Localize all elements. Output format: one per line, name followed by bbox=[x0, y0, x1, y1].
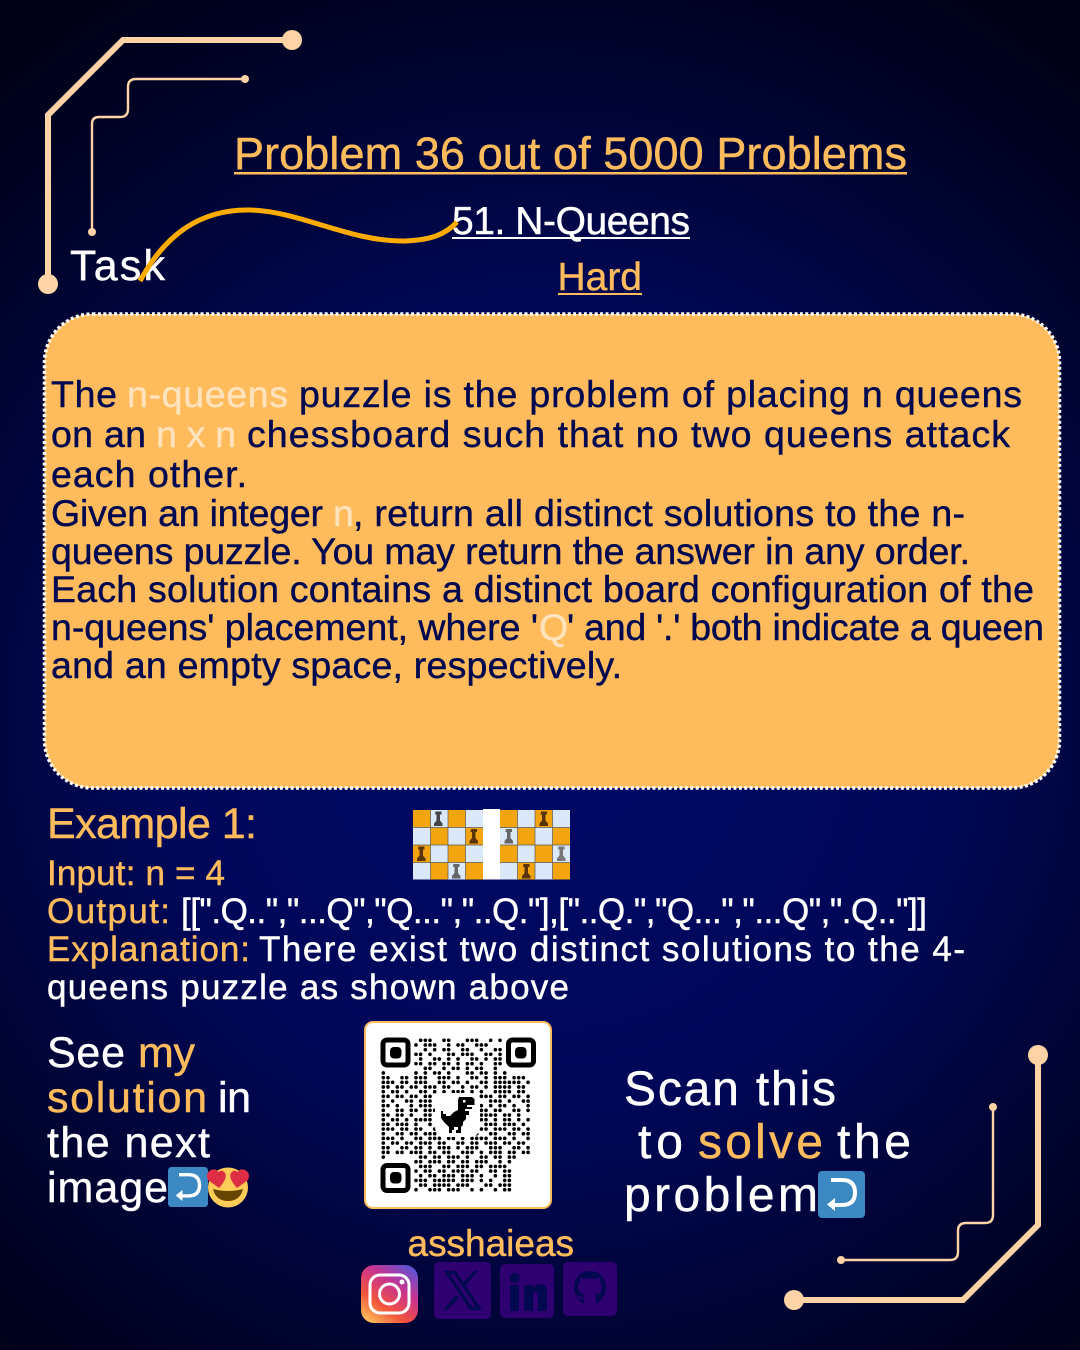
description text: , return all distinct solutions to the n- bbox=[353, 492, 965, 534]
description text: on an bbox=[51, 413, 146, 455]
circuit decoration: bottom right bbox=[784, 1045, 1048, 1310]
QR finder patterns bbox=[383, 1040, 534, 1190]
circuit decoration: top left bbox=[38, 30, 302, 294]
QR quiet areas bbox=[378, 1035, 538, 1195]
description text: n-queens bbox=[127, 373, 288, 415]
QR dots bbox=[383, 1040, 533, 1190]
description text: and an empty space, respectively. bbox=[51, 644, 622, 686]
example details: Input: n = 4 bbox=[47, 854, 225, 893]
username: asshaieas bbox=[408, 1223, 574, 1264]
example details: Output: bbox=[47, 892, 170, 931]
QR dinosaur logo bbox=[441, 1097, 474, 1133]
call to action: scan: problem bbox=[624, 1169, 818, 1222]
icon: return arrow large bbox=[818, 1171, 865, 1218]
call to action: scan: to bbox=[638, 1116, 683, 1169]
example heading: Example 1: bbox=[47, 800, 257, 848]
connector curve bbox=[140, 210, 457, 281]
description text: n bbox=[333, 492, 354, 534]
difficulty label: Hard bbox=[558, 256, 642, 299]
call to action: see solution: in bbox=[218, 1074, 251, 1122]
description text: chessboard such that no two queens attack bbox=[247, 413, 1010, 455]
description text: ' and '.' both indicate a queen bbox=[567, 606, 1044, 648]
description text: each other. bbox=[51, 453, 247, 495]
icon: x bbox=[434, 1262, 491, 1319]
call to action: scan: Scan this bbox=[624, 1063, 836, 1116]
call to action: see solution: the next bbox=[47, 1119, 210, 1167]
call to action: see solution: image bbox=[47, 1164, 168, 1212]
call to action: see solution: solution bbox=[47, 1074, 207, 1122]
call to action: scan: solve bbox=[698, 1116, 823, 1169]
description text: Given an integer bbox=[51, 492, 323, 534]
call to action: see solution: my bbox=[138, 1029, 196, 1077]
example details bbox=[47, 854, 965, 1007]
call to action: scan bbox=[624, 1063, 911, 1222]
call to action: scan: the bbox=[837, 1116, 911, 1169]
description text: puzzle is the problem of placing n queens bbox=[299, 373, 1022, 415]
description text: queens puzzle. You may return the answer in any order. bbox=[51, 530, 970, 572]
icon: github bbox=[563, 1262, 617, 1316]
description text: The bbox=[51, 373, 117, 415]
description text: Each solution contains a distinct board configuration of the bbox=[51, 568, 1034, 610]
panel: problem description bbox=[44, 314, 1060, 788]
icon: instagram bbox=[361, 1265, 418, 1323]
example details: Explanation: bbox=[47, 930, 250, 969]
call to action: see solution: See bbox=[47, 1029, 125, 1077]
call to action: see solution bbox=[47, 1029, 251, 1212]
queens bbox=[417, 812, 566, 878]
icon: linkedin bbox=[500, 1264, 554, 1318]
example details: There exist two distinct solutions to the 4- bbox=[259, 930, 965, 969]
chess boards illustration bbox=[413, 809, 570, 880]
icon: heart eyes emoji bbox=[207, 1168, 249, 1208]
heading: problem title: 51. N-Queens bbox=[452, 200, 690, 243]
QR code card bbox=[365, 1022, 551, 1208]
description text: n x n bbox=[156, 413, 236, 455]
heading: problem counter: Problem 36 out of 5000 Problems bbox=[234, 128, 907, 179]
description text: Q bbox=[539, 606, 568, 648]
example details: [[".Q..","...Q","Q...","..Q."],["..Q.","Q...","...Q",".Q.."]] bbox=[181, 892, 927, 931]
task label: Task bbox=[70, 242, 166, 290]
example details: queens puzzle as shown above bbox=[47, 968, 569, 1007]
icon: return arrow small bbox=[168, 1167, 208, 1207]
description text bbox=[51, 373, 1044, 686]
description text: n-queens' placement, where ' bbox=[51, 606, 538, 648]
